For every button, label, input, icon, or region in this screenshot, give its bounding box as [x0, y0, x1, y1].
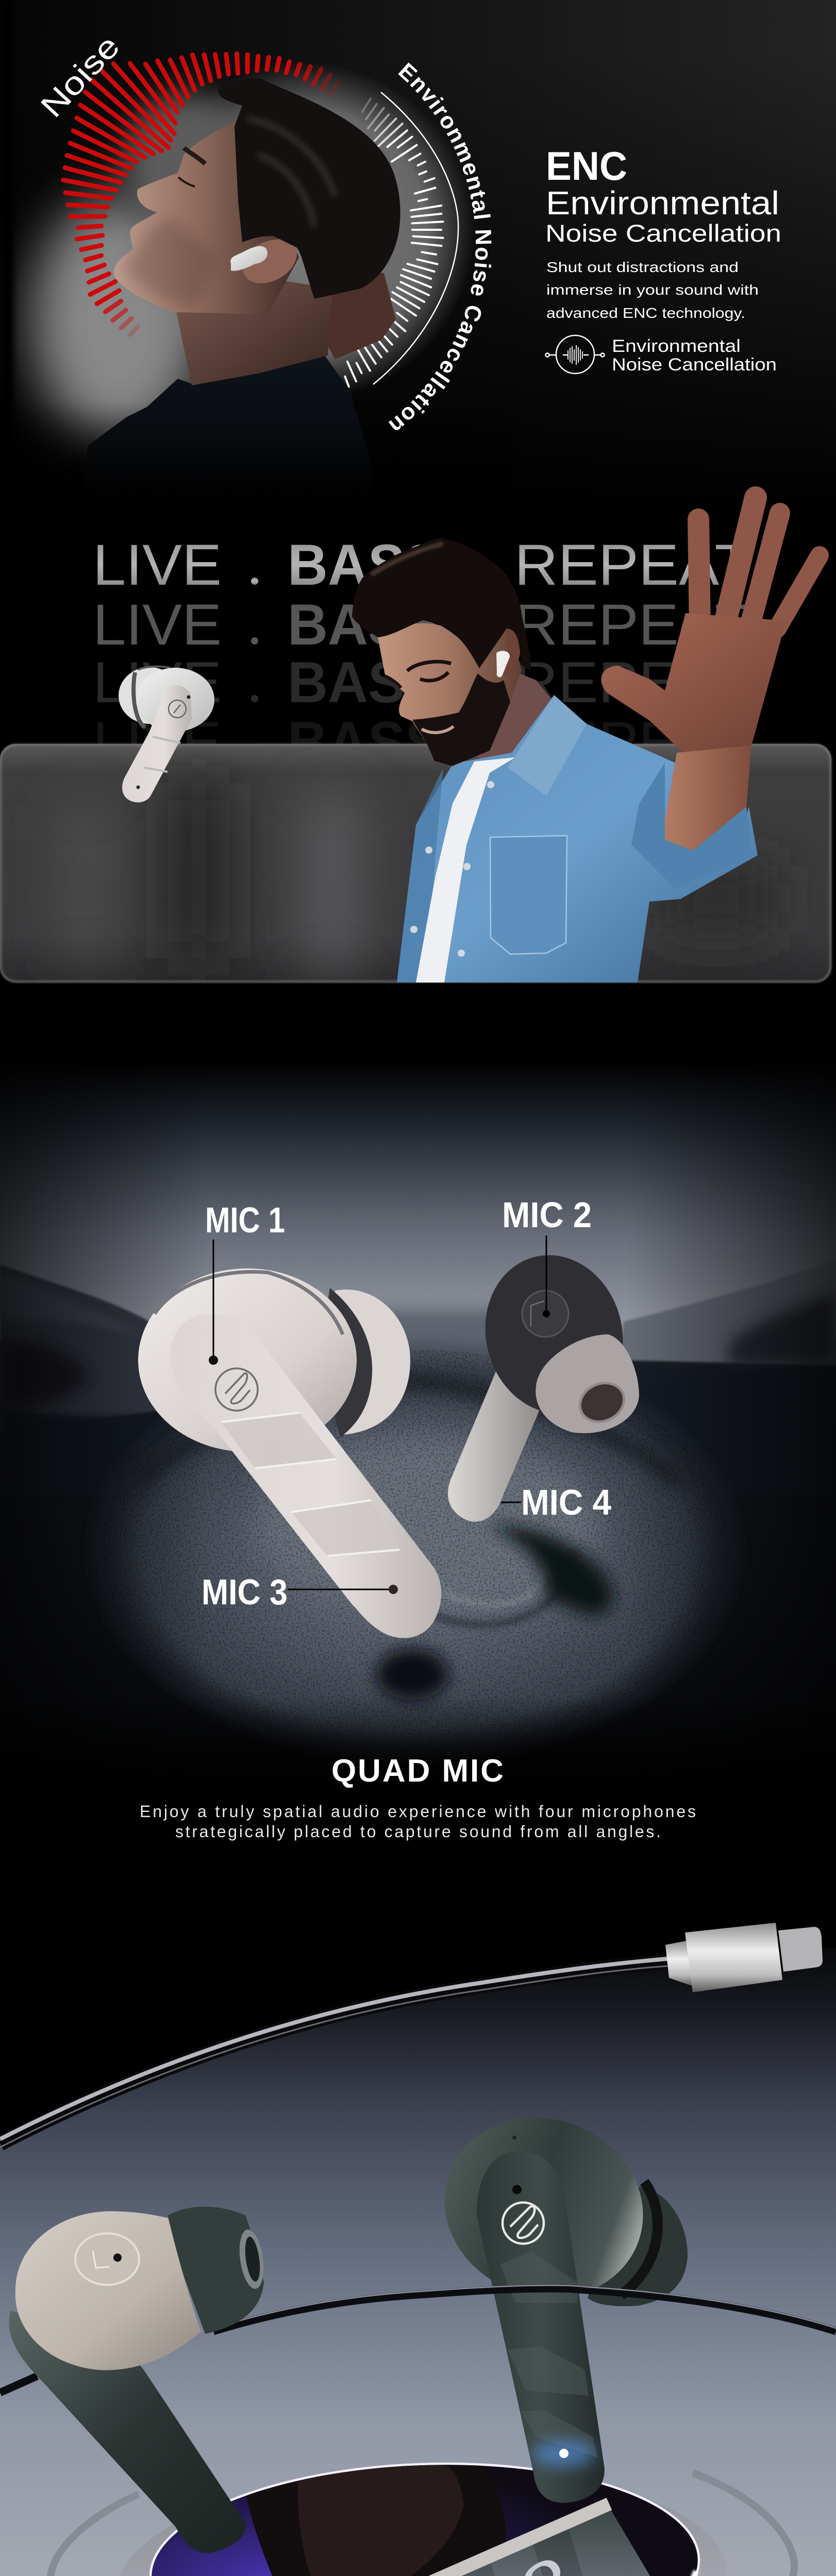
- gasket: [621, 2182, 658, 2295]
- shirt buttons: [410, 781, 494, 957]
- eartip: [536, 1334, 639, 1433]
- gasket: [320, 1288, 372, 1437]
- eartip hole: [574, 1376, 630, 1429]
- row 1: REPEAT: [514, 533, 751, 597]
- LED glow: [533, 2440, 595, 2467]
- icon: floating white earbud: [119, 667, 214, 802]
- silver rim: [113, 2458, 731, 2576]
- smile: [422, 726, 454, 733]
- body text: advanced ENC technology.: [546, 305, 745, 321]
- callout: MIC 1: MIC 1: [205, 1200, 285, 1240]
- photo: man listening in profile: [72, 78, 400, 515]
- scenery: desert dunes and crater: [0, 1077, 836, 1757]
- closed eye: [178, 177, 195, 187]
- beard: [412, 673, 510, 766]
- glowing inner ring: [148, 2456, 701, 2576]
- stem ribs: [500, 2251, 598, 2458]
- heading: QUAD MIC: QUAD MIC: [331, 1753, 504, 1789]
- eartip: [168, 2207, 264, 2334]
- product: charging case: [69, 2452, 731, 2576]
- denim shirt: [397, 695, 758, 982]
- ear: [242, 239, 297, 283]
- row 2: REPEAT: [514, 592, 751, 657]
- case interior: [152, 2465, 698, 2576]
- collar: [508, 695, 587, 796]
- crater rim: [134, 1381, 680, 1484]
- right dune: [618, 1259, 836, 1365]
- row 1: LIVE: [93, 533, 222, 597]
- row 2: LIVE: [93, 592, 222, 657]
- logo: [215, 1368, 258, 1411]
- eyebrow and closed eye: [407, 662, 451, 681]
- heading: ENC: ENC: [546, 143, 627, 189]
- text block: ENC heading and description: Noise Cancellation: [612, 355, 777, 375]
- row 1: BASS: [288, 533, 442, 597]
- mic hole: [512, 2185, 522, 2194]
- button circle: [522, 1291, 569, 1337]
- row 4: REPEAT: [514, 710, 751, 774]
- dune base shadow: [0, 1365, 836, 1494]
- ribbed lid panel: [266, 2504, 696, 2576]
- hair: [218, 78, 400, 299]
- row 3: LIVE: [93, 650, 222, 715]
- callouts: microphone labels: [202, 1195, 611, 1612]
- silver lid edge: [265, 2504, 609, 2576]
- crater floor: [80, 1334, 750, 1767]
- face: [114, 122, 299, 314]
- white t-shirt: [416, 757, 515, 982]
- icon: white earbud in ear: [496, 651, 510, 677]
- row 1: [93, 533, 751, 597]
- body text: [546, 259, 759, 321]
- callout: MIC 4: MIC 4: [521, 1482, 611, 1522]
- icon: white earbud in ear: [230, 246, 267, 271]
- side vignette: [0, 1061, 836, 1834]
- front rim highlight: [149, 2571, 696, 2576]
- body text: Shut out distractions and: [546, 259, 739, 275]
- face: [378, 623, 522, 766]
- usb-c tip: [778, 1927, 823, 1972]
- row 4: BASS: [288, 710, 442, 774]
- body text: immerse in your sound with: [546, 282, 759, 298]
- repeated slogan: LIVE . BASS . REPEAT: [93, 533, 751, 774]
- callout: MIC 3: [202, 1572, 398, 1612]
- curved label: Noise: Noise: [34, 29, 127, 125]
- cream head: [15, 2211, 201, 2370]
- row 3: BASS: [288, 650, 442, 715]
- row 3: REPEAT: [514, 650, 751, 715]
- collar: [665, 1941, 693, 1986]
- section background: sphere backdrop: [0, 1947, 836, 2576]
- hand and fingers: [601, 498, 820, 752]
- row 4: [93, 710, 751, 774]
- neck: [176, 273, 332, 385]
- hand behind head: [325, 269, 396, 359]
- row 3: [93, 650, 751, 715]
- stem: [448, 1364, 542, 1522]
- section background: ENC: [0, 0, 836, 515]
- shirt fade: [72, 443, 381, 515]
- thin cable arc in front: [0, 2285, 836, 2393]
- body text: quad mic description: strategically placed to capture sound from all angles.: [175, 1822, 661, 1841]
- neck: [476, 670, 558, 768]
- icon label: Environmental: [612, 336, 741, 356]
- body text: quad mic description: [140, 1802, 696, 1841]
- beard shadow: [124, 216, 216, 309]
- row 2: [93, 592, 751, 657]
- eartip hole: [236, 2228, 267, 2290]
- eyebrow: [184, 148, 205, 164]
- earbud cast shadows: [490, 1525, 613, 1615]
- photo: smiling man in denim shirt: [352, 498, 820, 982]
- text block: ENC heading and description: [545, 143, 781, 375]
- barrel: [685, 1923, 782, 1992]
- curved label: Environmental Noise Cancellation: Environmental Noise Cancellation: [389, 62, 492, 430]
- icon: circular sound wave: [545, 335, 604, 374]
- row 4: LIVE: [93, 710, 222, 774]
- product: cream earbud, left: [9, 2207, 267, 2553]
- body: [138, 1268, 357, 1452]
- hazy distance: [258, 1309, 588, 1401]
- shirt: [80, 355, 373, 515]
- panel: frosted gray card: [0, 744, 831, 982]
- chart: white cancelled sound bars: [345, 99, 443, 386]
- stem: [477, 2151, 605, 2503]
- left dune: [0, 1264, 268, 1432]
- stem: [9, 2311, 245, 2553]
- usb cable with connector: [0, 1923, 823, 2147]
- eartip: [588, 2187, 688, 2306]
- eartip: [335, 1290, 410, 1435]
- body text: quad mic description: Enjoy a truly spatial audio experience with four microphones: [140, 1802, 696, 1821]
- forearm: [661, 745, 751, 851]
- callout: MIC 3: MIC 3: [202, 1572, 288, 1612]
- product: white earbud, left: [138, 1268, 441, 1638]
- head: [419, 2090, 668, 2325]
- ground: [0, 1340, 836, 1855]
- callout: MIC 2: MIC 2: [502, 1195, 592, 1235]
- thin outer ring, back: [51, 2473, 794, 2576]
- thin arc around the white bars: [373, 92, 458, 384]
- product: right earbud with dark head: [448, 1241, 640, 1522]
- section background: desert sky: [0, 1061, 836, 1340]
- row 2: BASS: [288, 592, 442, 657]
- stem: [171, 1315, 441, 1638]
- product: dark earbud, right: [419, 2090, 688, 2503]
- ear: [505, 626, 521, 676]
- L button circle: [75, 2233, 139, 2285]
- hair: [352, 538, 531, 671]
- sand grain texture: [101, 1350, 730, 1752]
- heading: Noise Cancellation: Noise Cancellation: [545, 219, 781, 247]
- dark head: [469, 1241, 640, 1428]
- chart: red noise sound bars: [63, 54, 338, 335]
- logo: [503, 2202, 544, 2244]
- callout: MIC 2: [502, 1195, 592, 1317]
- callout: MIC 1: [205, 1200, 285, 1365]
- heading: Environmental: Environmental: [546, 184, 779, 222]
- cuff: [631, 762, 751, 889]
- earbud socket: [242, 2452, 507, 2576]
- cable: [0, 1962, 667, 2143]
- shirt pocket: [490, 836, 567, 954]
- stem ribs: [222, 1414, 399, 1556]
